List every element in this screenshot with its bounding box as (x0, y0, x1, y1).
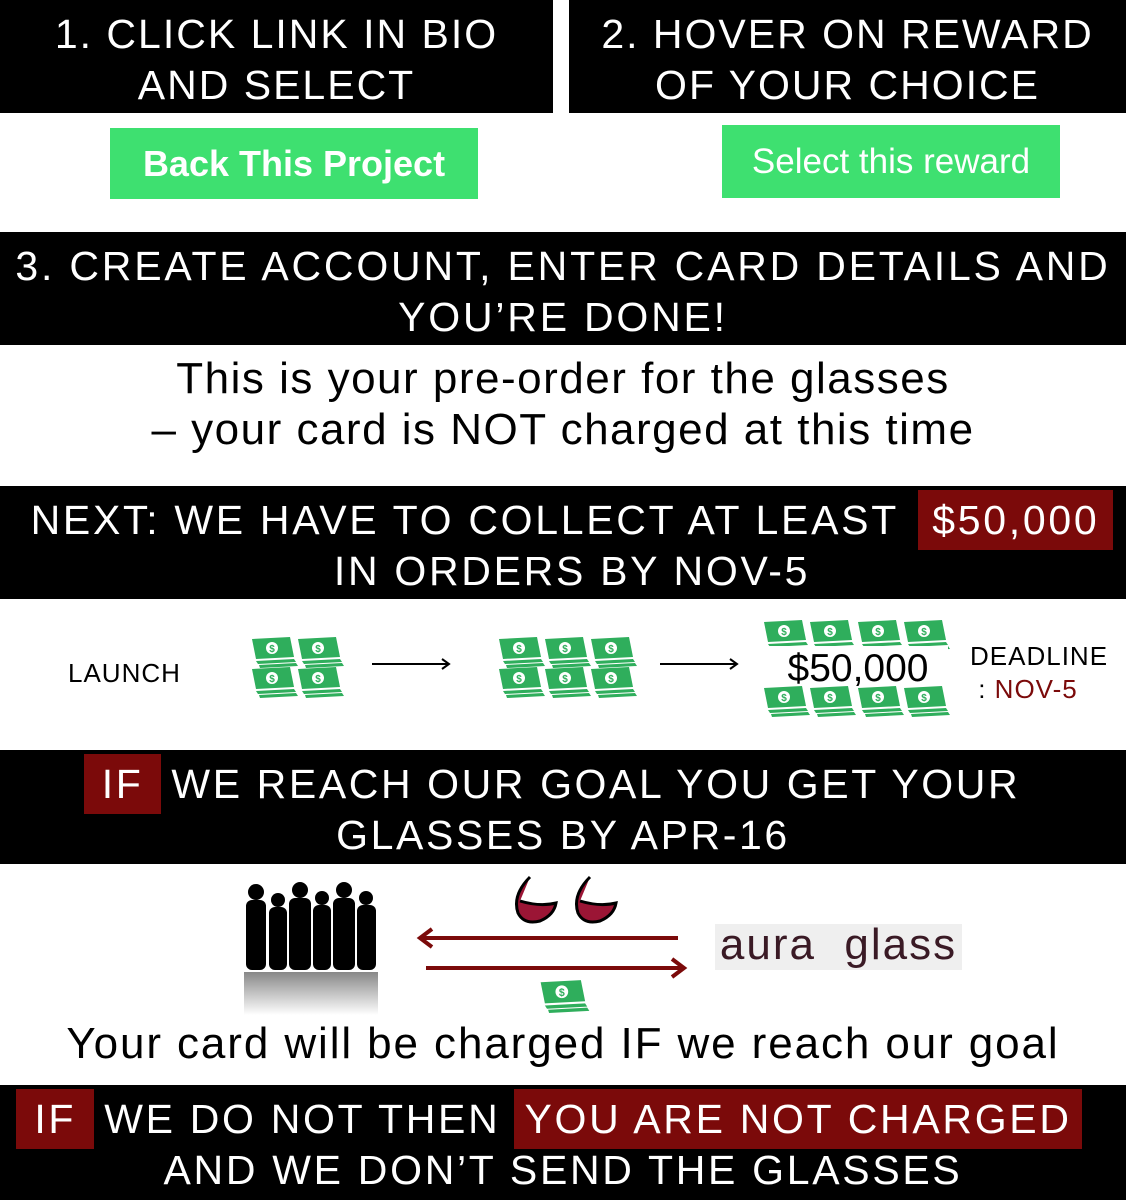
arrow 2 (660, 658, 739, 670)
button: select this reward (722, 125, 1060, 198)
pre-order note: – your card is NOT charged at this time (151, 405, 975, 454)
icon: money goal $50,000: $50,000 (788, 647, 928, 690)
button: back this project: Back This Project (143, 143, 445, 184)
deadline label (970, 641, 1108, 704)
step 1 banner: AND SELECT (138, 62, 415, 108)
if not banner (0, 1085, 1126, 1200)
icon: money small payment (540, 980, 590, 1013)
charged note: Your card will be charged IF we reach our goal (66, 1019, 1060, 1068)
arrow 1 (372, 658, 451, 670)
pre-order note (151, 354, 975, 454)
step 1 banner (0, 0, 553, 113)
if reach goal banner (0, 750, 1126, 864)
if not banner: IF WE DO NOT THEN YOU ARE NOT CHARGED (34, 1096, 1072, 1142)
icon: money goal $50,000 (764, 620, 950, 717)
next banner: NEXT: WE HAVE TO COLLECT AT LEAST $50,000 (31, 497, 1099, 543)
deadline label: : NOV-5 (978, 674, 1078, 704)
step 1 banner: 1. CLICK LINK IN BIO (55, 11, 498, 57)
if reach goal banner: GLASSES BY APR-16 (336, 812, 790, 858)
if reach goal banner: IF WE REACH OUR GOAL YOU GET YOUR (102, 761, 1020, 807)
step 3 banner (0, 232, 1126, 345)
step 2 banner (569, 0, 1126, 113)
arrow: glasses to people (416, 927, 678, 949)
launch label: LAUNCH (68, 658, 181, 688)
button: back this project (110, 128, 478, 199)
step 2 banner: 2. HOVER ON REWARD (601, 11, 1094, 57)
next banner (0, 486, 1126, 599)
next banner: IN ORDERS BY NOV-5 (334, 548, 810, 594)
arrow: money to aura glass (426, 957, 688, 979)
step 3 banner: 3. CREATE ACCOUNT, ENTER CARD DETAILS AND (15, 243, 1111, 289)
deadline label: DEADLINE (970, 641, 1108, 671)
step 2 banner: OF YOUR CHOICE (655, 62, 1040, 108)
icon: money small (252, 637, 344, 698)
pre-order note: This is your pre-order for the glasses (176, 354, 950, 403)
icon: money medium (499, 637, 637, 698)
if not banner: AND WE DON’T SEND THE GLASSES (164, 1147, 962, 1193)
button: select this reward: Select this reward (752, 142, 1030, 181)
logo: aura glass: aura glass (720, 920, 957, 969)
icon: wine glasses (515, 876, 618, 924)
icon: people silhouettes (244, 882, 378, 1012)
step 3 banner: YOU’RE DONE! (398, 294, 728, 340)
